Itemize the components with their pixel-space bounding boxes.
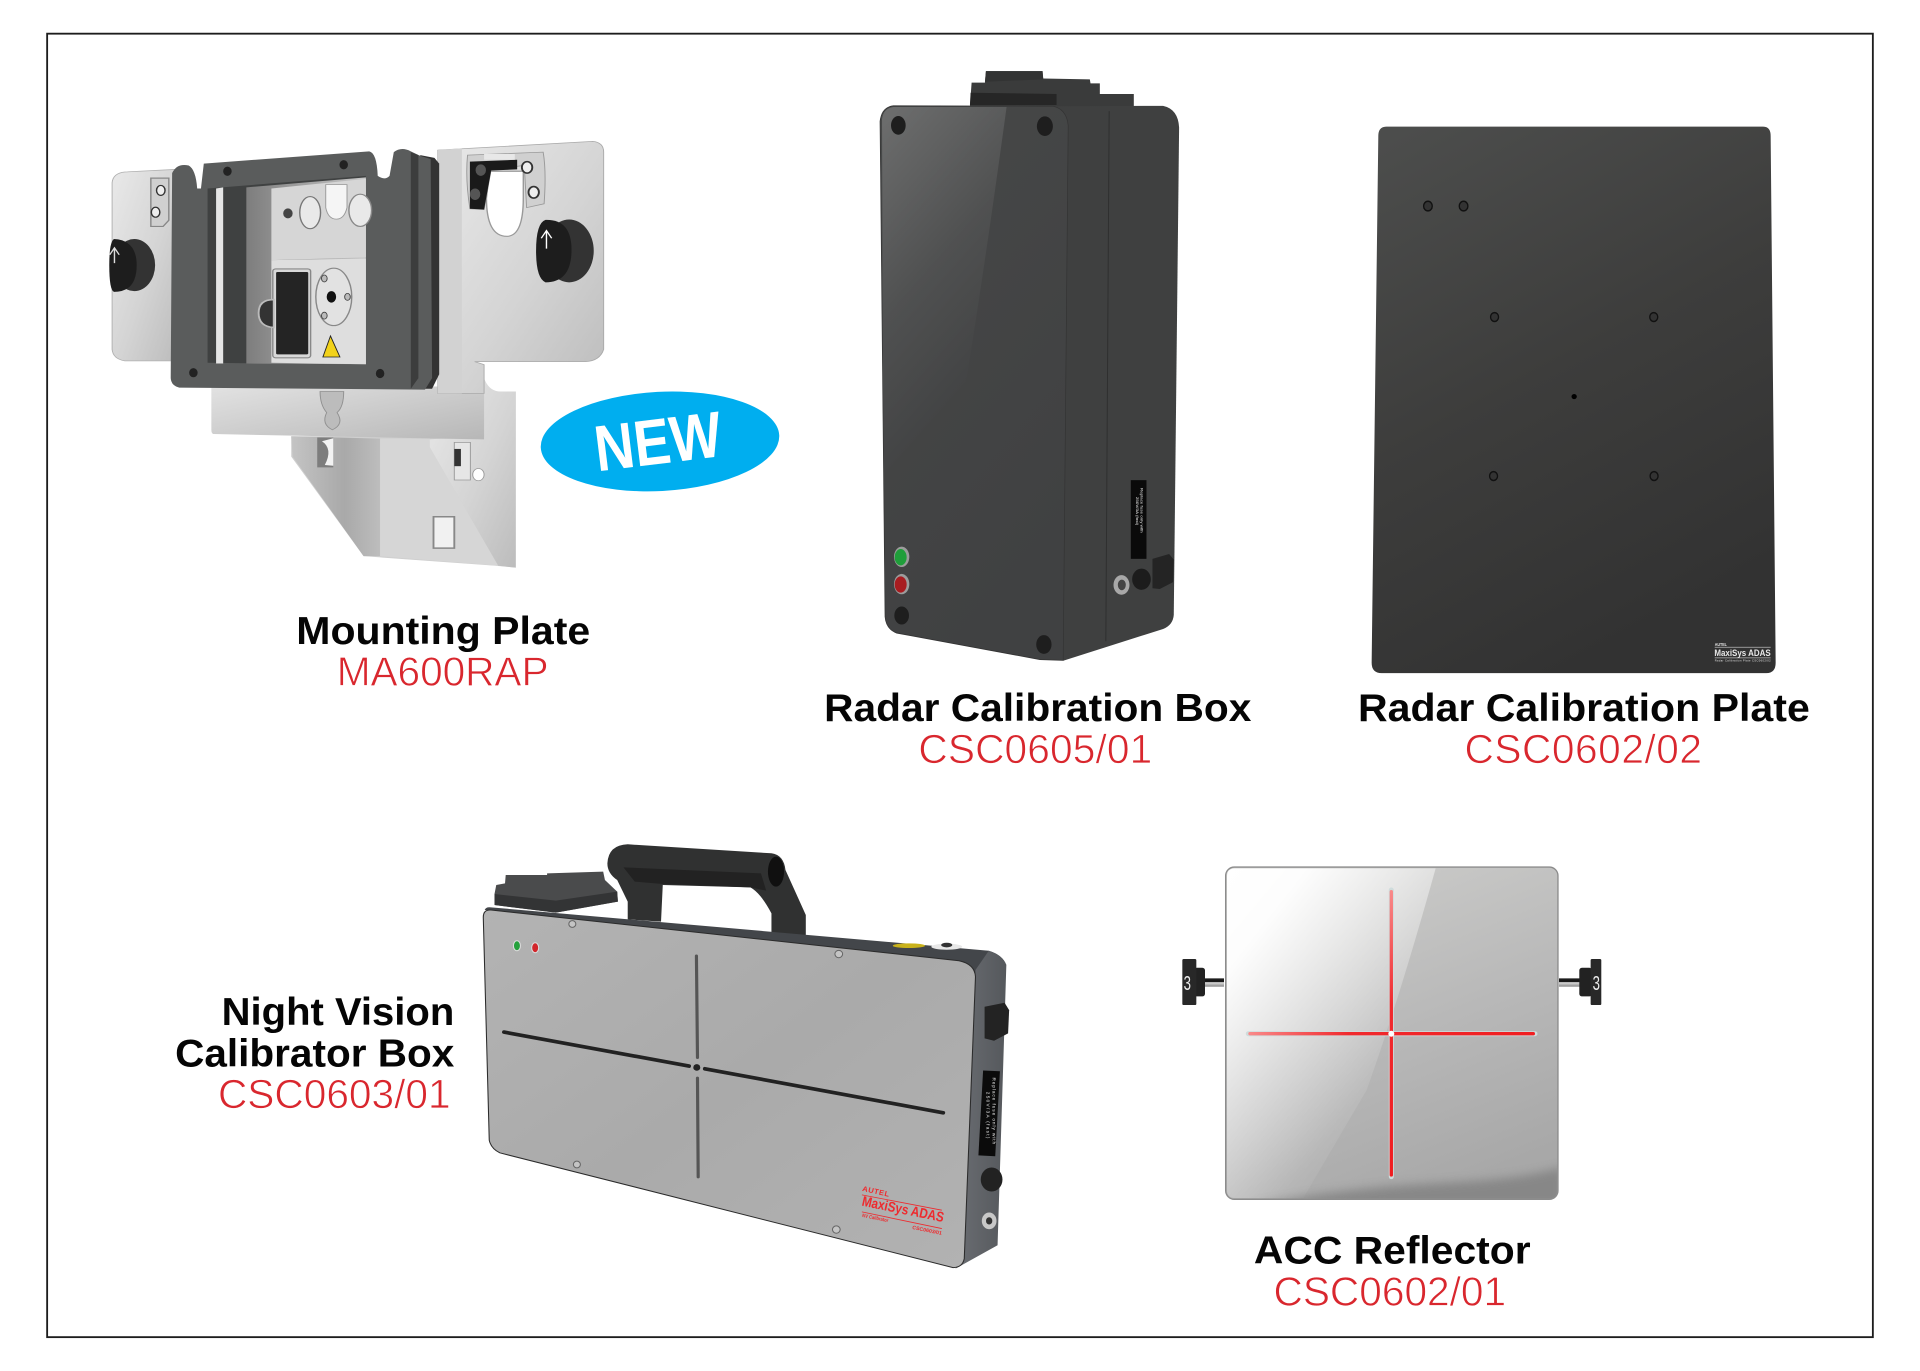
port, fuse and switch <box>1113 554 1174 595</box>
fuse label: Replace fuse only with <box>1140 488 1144 533</box>
label: radar calibration plate: Radar Calibration Plate <box>1358 687 1810 730</box>
cross slots <box>504 956 943 1177</box>
port <box>982 1213 997 1229</box>
center hole <box>693 1064 700 1071</box>
fuse holder <box>981 1168 1002 1192</box>
keyhole slot <box>320 391 344 430</box>
red crosshair <box>1248 890 1535 1177</box>
front face <box>483 910 975 1268</box>
product: radar calibration plate image <box>1372 127 1776 673</box>
side face <box>956 951 1006 1269</box>
left thumb screw: 3 <box>1184 972 1191 995</box>
label: radar calibration plate <box>1358 687 1810 772</box>
top mount <box>970 71 1134 107</box>
badge: NEW: NEW <box>590 397 726 485</box>
label: radar calibration plate: CSC0602/02 <box>1464 726 1702 772</box>
front face <box>880 106 1068 660</box>
fuse label: 250V/3A (fast) <box>1135 497 1140 526</box>
panel screws <box>569 921 843 1233</box>
logo: MaxiSys ADAS <box>1714 647 1771 658</box>
status LEDs <box>894 547 909 594</box>
fuse label <box>978 1070 1000 1156</box>
label: ACC reflector <box>1254 1230 1531 1314</box>
product: radar calibration box image <box>880 71 1179 661</box>
right thumb screw: 3 <box>1593 972 1600 995</box>
status LEDs <box>513 941 539 953</box>
top rim <box>485 907 1006 973</box>
red logo: NV Calibrator <box>861 1213 889 1224</box>
label: night vision calibrator box: Night Vision <box>222 991 454 1034</box>
label: night vision calibrator box: Calibrator Box <box>175 1033 455 1076</box>
label: mounting plate <box>296 610 590 695</box>
product: night vision calibrator box image <box>483 844 1009 1269</box>
gloss <box>882 107 1007 511</box>
logo <box>1714 642 1771 663</box>
label: ACC reflector: ACC Reflector <box>1254 1230 1531 1273</box>
lower horizontal plate <box>211 386 484 439</box>
right thumb screw <box>1559 959 1601 1005</box>
mounting holes <box>1424 201 1658 480</box>
bottom shadow <box>1274 1165 1558 1198</box>
right silver plate <box>438 141 604 393</box>
left knob <box>109 239 155 292</box>
plate <box>1372 127 1776 673</box>
red logo: CSC0603/01 <box>912 1225 943 1237</box>
carry handle <box>607 844 806 938</box>
fuse label: Replace fuse only with <box>990 1077 996 1144</box>
fuse label <box>1131 480 1146 559</box>
red logo: AUTEL <box>861 1184 891 1199</box>
label: radar calibration box: CSC0605/01 <box>918 726 1152 772</box>
logo: Radar Calibration Plate CSC0602/02 <box>1715 659 1771 663</box>
product: ACC reflector image <box>1182 867 1601 1207</box>
left thumb screw <box>1182 959 1224 1005</box>
fuse label: 250V/3A (fast) <box>985 1092 991 1139</box>
label: night vision calibrator box: CSC0603/01 <box>218 1071 451 1117</box>
right knob <box>536 220 594 282</box>
corner holes <box>891 116 1053 654</box>
reflector panel <box>1226 867 1558 1199</box>
logo: AUTEL <box>1715 642 1727 647</box>
gloss <box>1227 868 1436 1198</box>
bracket foot <box>291 378 516 568</box>
red logo: MaxiSys ADAS <box>860 1194 946 1226</box>
badge: NEW <box>538 386 782 497</box>
label: mounting plate: Mounting Plate <box>296 610 590 653</box>
bracket mount <box>494 872 618 913</box>
label: radar calibration box <box>824 687 1252 772</box>
dark frame <box>171 149 439 390</box>
power switch <box>985 1003 1009 1041</box>
side face <box>1053 106 1179 661</box>
product: mounting plate image <box>109 141 604 568</box>
label: mounting plate: MA600RAP <box>337 649 549 695</box>
label: radar calibration box: Radar Calibration Box <box>824 687 1252 730</box>
laser sticker and top connector <box>893 943 962 950</box>
center hole <box>1571 394 1577 399</box>
left latch <box>151 178 169 226</box>
red logo <box>860 1184 946 1237</box>
label: ACC reflector: CSC0602/01 <box>1273 1268 1506 1314</box>
label: night vision calibrator box <box>175 991 455 1117</box>
left silver plate <box>112 169 177 361</box>
